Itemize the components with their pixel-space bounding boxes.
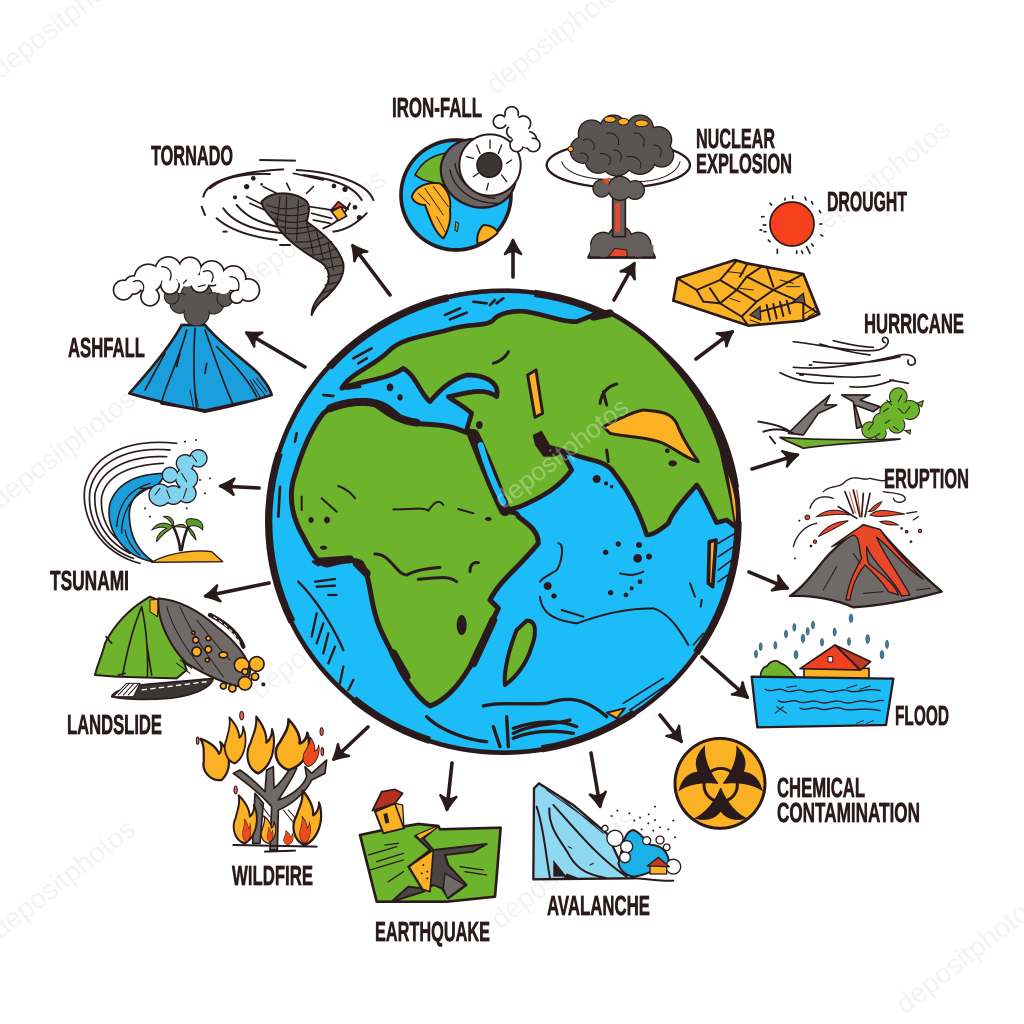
icon: earthquake xyxy=(360,789,501,902)
white blast xyxy=(459,134,521,196)
white ash cloud xyxy=(113,256,260,307)
watermark: depositphotos xyxy=(485,803,641,935)
watermark: depositphotos xyxy=(245,573,401,705)
icon: tornado xyxy=(202,160,373,315)
shock disc xyxy=(547,142,690,188)
mountain xyxy=(533,783,633,879)
icon: avalanche xyxy=(533,783,681,881)
arrow to eruption xyxy=(749,572,787,588)
yellow islands xyxy=(708,540,716,587)
small house xyxy=(650,865,667,874)
icon: sun xyxy=(760,196,823,253)
africa xyxy=(291,402,538,706)
label: chemical contamination: CONTAMINATION xyxy=(777,797,920,828)
mountain xyxy=(790,525,942,607)
arctic hatch xyxy=(278,298,503,517)
island xyxy=(152,551,223,562)
water block xyxy=(752,677,893,727)
mushroom base xyxy=(590,226,652,258)
eurasia xyxy=(342,311,737,535)
watermark: depositphotos xyxy=(800,113,956,245)
flying house xyxy=(332,207,347,221)
broken trunks xyxy=(788,395,837,435)
globe rim strokes xyxy=(269,291,738,752)
outer wave lines xyxy=(84,442,177,563)
steam outline xyxy=(793,478,918,547)
flames xyxy=(195,716,323,846)
icon: chemical contamination biohazard xyxy=(675,738,765,828)
yellow fragment xyxy=(409,850,433,892)
label: ashfall: ASHFALL xyxy=(68,332,145,363)
volcano cone xyxy=(129,325,272,412)
snow balls xyxy=(602,825,681,874)
rain drops xyxy=(754,614,889,659)
label: drought: DROUGHT xyxy=(827,186,907,217)
globe xyxy=(268,291,739,753)
persian gulf xyxy=(533,431,568,457)
house xyxy=(804,668,869,681)
ocean ridges xyxy=(540,543,702,645)
icon: tsunami xyxy=(84,439,223,563)
crack xyxy=(392,826,487,902)
icon: iron-fall xyxy=(401,107,540,250)
collar xyxy=(592,176,645,201)
red sea xyxy=(473,435,505,510)
stem xyxy=(613,190,625,237)
foam xyxy=(148,449,208,507)
arrow to landslide xyxy=(206,583,269,596)
fish skeleton xyxy=(760,301,797,320)
label: tornado: TORNADO xyxy=(151,140,233,171)
wind lines xyxy=(780,337,915,387)
road swirl behind xyxy=(210,615,243,647)
madagascar xyxy=(505,621,535,685)
icon: hurricane xyxy=(758,337,923,448)
arrow to earthquake xyxy=(447,763,452,809)
ocean islands xyxy=(544,475,652,599)
label: iron-fall: IRON-FALL xyxy=(392,92,482,123)
label: landslide: LANDSLIDE xyxy=(67,709,162,740)
label: chemical contamination xyxy=(777,772,920,828)
land detail strokes xyxy=(302,486,473,513)
palms xyxy=(173,527,188,550)
depositphotos overlay on globe: depositphotos xyxy=(488,391,634,515)
label: chemical contamination: CHEMICAL xyxy=(777,772,865,803)
foliage xyxy=(861,387,920,440)
ash cloud dark xyxy=(164,281,233,326)
icon: nuclear explosion xyxy=(547,114,690,258)
ocean west hatch strokes xyxy=(298,579,353,690)
arrows xyxy=(206,241,797,809)
tilted house xyxy=(375,803,404,833)
road xyxy=(112,678,213,699)
label: nuclear explosion: NUCLEAR xyxy=(696,123,775,154)
arrow to tsunami xyxy=(221,486,259,488)
icon: flood xyxy=(752,614,893,727)
smoke trail xyxy=(493,107,540,152)
grey slide xyxy=(158,598,250,687)
yellow east coast xyxy=(725,463,737,530)
icon: eruption xyxy=(790,478,942,607)
arrow to tornado xyxy=(353,246,390,295)
mushroom cloud xyxy=(569,114,674,177)
label: avalanche: AVALANCHE xyxy=(547,890,650,921)
ocean disc xyxy=(268,291,739,753)
label: nuclear explosion xyxy=(696,123,792,179)
meteor xyxy=(477,153,502,177)
ground xyxy=(780,437,900,448)
rocks xyxy=(192,631,264,692)
arrow to chemical contamination xyxy=(660,715,681,741)
green ground xyxy=(360,824,501,902)
blue wave xyxy=(109,473,167,562)
icon: ashfall volcano xyxy=(113,256,272,412)
arrow to hurricane xyxy=(752,455,797,469)
yellow ural strip xyxy=(528,370,543,417)
watermark: depositphotos xyxy=(235,163,391,295)
green mountain xyxy=(95,597,187,678)
small earth xyxy=(401,140,511,250)
snow dots xyxy=(611,806,676,838)
label: tsunami: TSUNAMI xyxy=(50,565,129,596)
lava flows xyxy=(832,525,923,600)
icon: drought cracked earth xyxy=(673,260,819,326)
arrow to nuclear explosion xyxy=(614,264,634,300)
impact ring xyxy=(430,127,527,220)
arrow to wildfire xyxy=(334,727,368,759)
snow blast blue xyxy=(618,830,669,877)
arrow to iron-fall xyxy=(511,241,515,277)
arrow to drought xyxy=(696,332,732,359)
label: earthquake: EARTHQUAKE xyxy=(375,916,490,947)
icon: wildfire xyxy=(195,711,327,852)
label: flood: FLOOD xyxy=(895,700,949,731)
arrow to flood xyxy=(702,657,747,697)
funnel xyxy=(262,193,344,315)
arrow to ashfall xyxy=(247,333,305,367)
trunk xyxy=(233,760,327,850)
labels xyxy=(50,92,969,947)
yellow tibet plateau xyxy=(603,410,698,462)
arrow to avalanche xyxy=(591,753,600,806)
thick coast accents xyxy=(320,313,610,677)
label: nuclear explosion: EXPLOSION xyxy=(696,148,792,179)
bush xyxy=(761,661,796,677)
antarctic coast xyxy=(427,699,607,747)
lava splashes xyxy=(817,502,905,537)
icon: landslide xyxy=(95,597,265,699)
label: wildfire: WILDFIRE xyxy=(232,860,313,891)
